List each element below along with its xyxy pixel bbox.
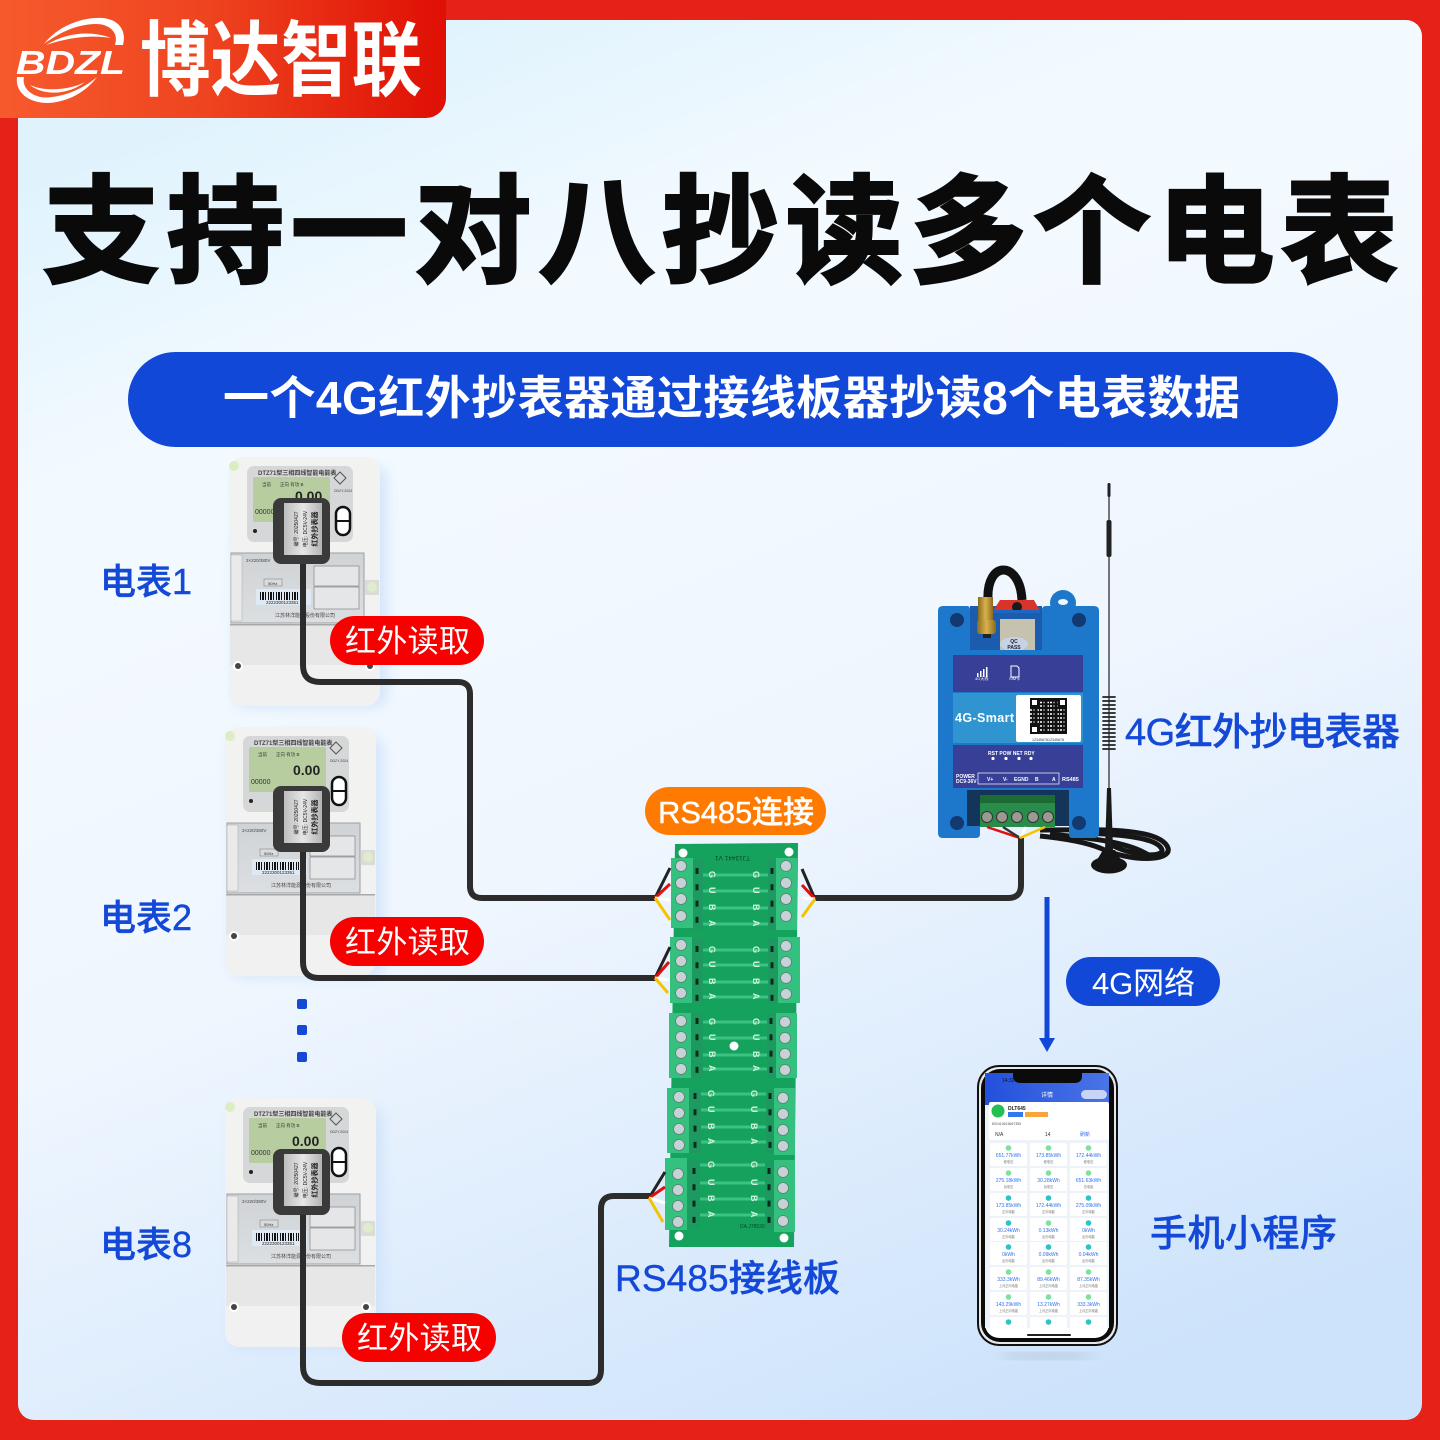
RS485 terminal board: G <box>751 871 761 878</box>
RS485 terminal board: B <box>707 978 717 985</box>
RS485 terminal board: B <box>707 1051 717 1058</box>
phone screen: 173.85kWh <box>996 1203 1021 1209</box>
RS485 terminal board: A <box>751 920 761 927</box>
phone screen: 正向电能 <box>1042 1209 1056 1214</box>
label: 4G IR reader: 4G红外抄电表器 <box>1125 712 1400 754</box>
meter 2: 当前 正向 有功 B <box>258 751 300 758</box>
logo banner <box>0 0 446 118</box>
phone screen: 275.18kWh <box>996 1178 1021 1184</box>
RS485 terminal board: A <box>707 1065 717 1072</box>
label: RS485 board: RS485接线板 <box>615 1258 840 1299</box>
RS485 terminal board: A <box>749 1138 759 1145</box>
RS485 terminal board: G <box>749 1090 759 1097</box>
IR sensor on meter 8: 电压: DC5V-24V <box>302 1161 309 1198</box>
antenna coil <box>1103 697 1115 749</box>
phone screen: 87.35kWh <box>1077 1277 1100 1283</box>
RS485 terminal board: U <box>749 1179 759 1186</box>
phone screen: 上月正向电能 <box>1079 1308 1099 1313</box>
top navy panel <box>953 655 1083 692</box>
IR sensor on meter 1: 红外抄表器 <box>310 512 319 546</box>
RS485 terminal board: G <box>707 871 717 878</box>
RS485 terminal board: A <box>749 1211 759 1218</box>
terminal blocks left <box>665 858 703 1230</box>
RS485 terminal board: DA.J78530 <box>740 1224 765 1230</box>
RS485 terminal board: U <box>707 1034 717 1040</box>
meter 2 <box>225 727 384 978</box>
phone screen: 14 <box>1045 1132 1051 1138</box>
subtitle pill <box>128 352 1338 447</box>
gold connector <box>977 597 996 638</box>
RS485 terminal board: U <box>751 1034 761 1040</box>
meter 2: DTZ71型三相四线智能电能表 <box>254 739 332 747</box>
RS485 terminal board: B <box>751 904 761 911</box>
callout: infrared read 2: 红外读取 <box>345 925 470 960</box>
phone screen: 反向电能 <box>1042 1234 1056 1239</box>
RS485 terminal board: B <box>706 1123 716 1130</box>
icon: BDZL logo swoosh: BDZL <box>16 44 125 81</box>
RS485 terminal board: U <box>706 1179 716 1186</box>
phone screen: 0.04kWh <box>1079 1252 1099 1258</box>
4G device: 4G-Smart <box>955 711 1015 725</box>
phone screen: 谷电压 <box>1004 1184 1014 1189</box>
phone screen: 谷电压 <box>1044 1184 1054 1189</box>
4G device: RST POW NET RDY <box>988 751 1035 757</box>
callout: infrared read 3: 红外读取 <box>357 1321 482 1356</box>
4G device: POWER <box>956 774 975 780</box>
antenna cable coil <box>1040 830 1168 858</box>
IR sensor on meter 1 <box>273 498 330 564</box>
IR sensor on meter 2: 电压: DC5V-24V <box>302 798 309 835</box>
callout: RS485 connection <box>645 787 826 835</box>
phone screen: 0kWh <box>1002 1252 1015 1258</box>
4G device: V- <box>1003 777 1008 783</box>
meter 8: DDZY-2024 <box>330 1130 348 1134</box>
phone screen: 651.63kWh <box>1076 1178 1101 1184</box>
4G device: B <box>1035 777 1039 783</box>
RS485 terminal board: B <box>749 1195 759 1202</box>
callout: infrared read 1 <box>330 616 484 665</box>
meter 1 <box>229 457 388 708</box>
arrow: 4G network down <box>1039 897 1055 1052</box>
meter 2: 3×220/380V <box>242 828 266 833</box>
RS485 terminal board: A <box>706 1211 716 1218</box>
callout: infrared read 1: 红外读取 <box>345 624 470 659</box>
phone screen: 刷新 <box>1080 1131 1090 1138</box>
phone screen: 172.44kWh <box>1076 1153 1101 1159</box>
IR sensor on meter 2 <box>273 786 330 852</box>
RS485 terminal board: U <box>707 961 717 968</box>
wire: meter 2 to board <box>303 850 656 978</box>
terminal blocks right <box>765 858 800 1232</box>
sim holder: PASS <box>1007 645 1021 651</box>
meter 1: DTZ71型三相四线智能电能表 <box>258 469 336 477</box>
logo wordmark: 博达智联 <box>140 16 422 107</box>
sim holder: QC <box>1010 639 1018 645</box>
wire: meter 8 to board <box>303 1196 650 1383</box>
meter 2: 50Hz <box>264 851 273 856</box>
meter 1: 3×220/380V <box>246 558 270 563</box>
RS485 terminal board: B <box>751 1051 761 1058</box>
QR code <box>1030 698 1067 734</box>
IR sensor on meter 8: 编号: 20250427 <box>293 1162 300 1198</box>
label: meter 8: 电表8 <box>100 1224 192 1265</box>
phone screen: 333.3kWh <box>1077 1302 1100 1308</box>
RS485 terminal board: A <box>707 920 717 927</box>
meter 2: 00000 <box>251 779 271 786</box>
RS485 terminal board: G <box>706 1090 716 1097</box>
4G device: RS485 <box>1062 777 1079 783</box>
terminal connector <box>967 790 1069 826</box>
callout: infrared read 3 <box>342 1313 496 1362</box>
meter 1: 当前 正向 有功 B <box>262 481 304 488</box>
terminal screws <box>672 860 792 1228</box>
meter 8 <box>225 1098 384 1349</box>
sim holder <box>993 600 1040 651</box>
RS485 terminal board: G <box>751 946 761 953</box>
phone screen: 上月正向电能 <box>1039 1308 1059 1313</box>
SMA cable <box>988 570 1022 600</box>
phone screen: 30.24kWh <box>997 1228 1020 1234</box>
RS485 terminal board: U <box>751 961 761 968</box>
4G device: SIM卡 <box>1009 675 1020 681</box>
meter 1: 江苏林洋能源股份有限公司 <box>275 612 335 619</box>
lower navy panel <box>953 745 1083 788</box>
RS485 terminal board: U <box>706 1106 716 1112</box>
phone screen: 峰电压 <box>1044 1159 1054 1164</box>
phone screen: 反向电能 <box>1082 1234 1096 1239</box>
phone screen: 反向电能 <box>1082 1258 1096 1263</box>
4G device: V+ <box>987 777 993 783</box>
meter 8: 江苏林洋能源股份有限公司 <box>271 1253 331 1260</box>
phone screen: 正向电能 <box>1082 1209 1096 1214</box>
IR sensor on meter 8 <box>273 1149 330 1215</box>
phone screen: 详情 <box>1041 1091 1053 1099</box>
meter 2: 江苏林洋能源股份有限公司 <box>271 882 331 889</box>
RS485 terminal board: A <box>751 993 761 1000</box>
RS485 terminal board: G <box>706 1161 716 1168</box>
phone screen: 30.28kWh <box>1037 1178 1060 1184</box>
IR sensor on meter 1: 电压: DC5V-24V <box>302 510 309 547</box>
phone screen: 0.09kWh <box>1039 1252 1059 1258</box>
meter 1: 00000 <box>255 509 275 516</box>
icon: BDZL logo swoosh <box>16 18 125 103</box>
phone screen: 14:32 <box>1002 1078 1015 1084</box>
meter 8: 00000 <box>251 1150 271 1157</box>
phone screen: 上月正向电能 <box>999 1283 1019 1288</box>
phone screen: 143.29kWh <box>996 1302 1021 1308</box>
phone screen: 正向电能 <box>1002 1209 1016 1214</box>
4G device: DC9-36V <box>956 779 977 785</box>
phone screen: 0.13kWh <box>1039 1228 1059 1234</box>
callout: RS485 connection: RS485连接 <box>658 795 814 830</box>
4G device: 1234567812345678 <box>1032 738 1064 742</box>
RS485 terminal board: TJ13441 V1 <box>715 854 750 861</box>
phone screen: 峰电压 <box>1084 1159 1094 1164</box>
RS485 terminal board: G <box>707 1018 717 1025</box>
device card <box>989 1102 1109 1140</box>
4G device <box>938 570 1099 838</box>
meter 1: 2222300123351 <box>266 600 299 605</box>
device body <box>938 606 1099 838</box>
phone screen: 峰电压 <box>1004 1159 1014 1164</box>
phone notch <box>1013 1073 1082 1083</box>
RS485 terminal board: G <box>749 1161 759 1168</box>
meter 8: 50Hz <box>264 1222 273 1227</box>
label: meter 2: 电表2 <box>100 897 192 938</box>
IR sensor on meter 1: 编号: 20250427 <box>293 511 300 547</box>
phone <box>977 1065 1118 1359</box>
device wires <box>987 827 1045 838</box>
phone screen: 反向电能 <box>1042 1258 1056 1263</box>
phone screen: 13.27kWh <box>1037 1302 1060 1308</box>
phone screen: 反向电能 <box>1002 1258 1016 1263</box>
home bar <box>1027 1334 1071 1336</box>
phone screen: 总电能 <box>1084 1184 1094 1189</box>
fan-out wires at board <box>649 868 815 1222</box>
ellipsis dots <box>297 999 307 1062</box>
phone screen <box>985 1073 1109 1340</box>
RS485 terminal board: U <box>749 1106 759 1112</box>
RS485 terminal board: A <box>751 1065 761 1072</box>
RS485 terminal board: B <box>749 1123 759 1130</box>
phone screen: DLT645 <box>1008 1106 1026 1112</box>
RS485 terminal board: G <box>751 1018 761 1025</box>
label: meter 1: 电表1 <box>100 561 192 602</box>
wire: board to device <box>815 838 1021 898</box>
4G device: EGND <box>1014 777 1029 783</box>
phone screen: 上月正向电能 <box>1039 1283 1059 1288</box>
phone screen: 172.44kWh <box>1036 1203 1061 1209</box>
meter 8: DTZ71型三相四线智能电能表 <box>254 1110 332 1118</box>
meter 1: 50Hz <box>268 581 277 586</box>
phone screen: 上月正向电能 <box>999 1308 1019 1313</box>
meter 2: DDZY-2024 <box>330 759 348 763</box>
antenna <box>1091 483 1127 874</box>
RS485 terminal board: B <box>751 978 761 985</box>
RS485 terminal board <box>665 843 800 1247</box>
callout: infrared read 2 <box>330 917 484 966</box>
meter 8: 0.00 <box>292 1133 319 1149</box>
wire: meter 1 to board <box>303 560 656 898</box>
4G device: A <box>1052 777 1056 783</box>
RS485 terminal board: U <box>707 887 717 894</box>
terminal wire slots <box>694 868 772 1228</box>
IR sensor on meter 2: 红外抄表器 <box>310 800 319 834</box>
meter 8: 2222300123351 <box>262 1241 295 1246</box>
RS485 terminal board: G <box>707 946 717 953</box>
phone screen: 275.09kWh <box>1076 1203 1101 1209</box>
title: 支持一对八抄读多个电表 <box>43 167 1405 298</box>
RS485 terminal board: B <box>706 1195 716 1202</box>
IR sensor on meter 2: 编号: 20250427 <box>293 799 300 835</box>
callout: 4G network <box>1066 957 1220 1006</box>
phone screen: 173.85kWh <box>1036 1153 1061 1159</box>
meter 2: 2222300123351 <box>262 870 295 875</box>
IR sensor on meter 8: 红外抄表器 <box>310 1162 319 1198</box>
RS485 terminal board: A <box>707 993 717 1000</box>
label: mini program: 手机小程序 <box>1150 1213 1337 1254</box>
RS485 terminal board: B <box>707 904 717 911</box>
middle band <box>953 693 1083 743</box>
phone screen: 333.3kWh <box>997 1277 1020 1283</box>
meter 2: 0.00 <box>293 762 320 778</box>
phone screen: 上月正向电能 <box>1079 1283 1099 1288</box>
device pcb <box>970 606 1042 656</box>
phone screen: 802410615667355 <box>992 1122 1021 1126</box>
phone screen: 正向电能 <box>1002 1234 1016 1239</box>
subtitle pill: 一个4G红外抄表器通过接线板器抄读8个电表数据 <box>223 372 1240 424</box>
meter 1: 0.00 <box>295 488 322 504</box>
meter 8: 3×220/380V <box>242 1199 266 1204</box>
RS485 terminal board: A <box>706 1138 716 1145</box>
meter 1: DDZY-2024 <box>334 489 352 493</box>
phone screen: N/A <box>995 1132 1004 1138</box>
phone screen: 89.46kWh <box>1037 1277 1060 1283</box>
phone screen: 0kWh <box>1082 1228 1095 1234</box>
RS485 terminal board: U <box>751 887 761 894</box>
data cards <box>990 1143 1107 1340</box>
meter labels <box>100 561 192 1265</box>
device mounting ear <box>1050 590 1076 616</box>
callout: 4G network: 4G网络 <box>1092 966 1195 1001</box>
meter 8: 当前 正向 有功 B <box>258 1122 300 1129</box>
4G device: 4G天线 <box>975 675 988 681</box>
phone screen: 651.77kWh <box>996 1153 1021 1159</box>
